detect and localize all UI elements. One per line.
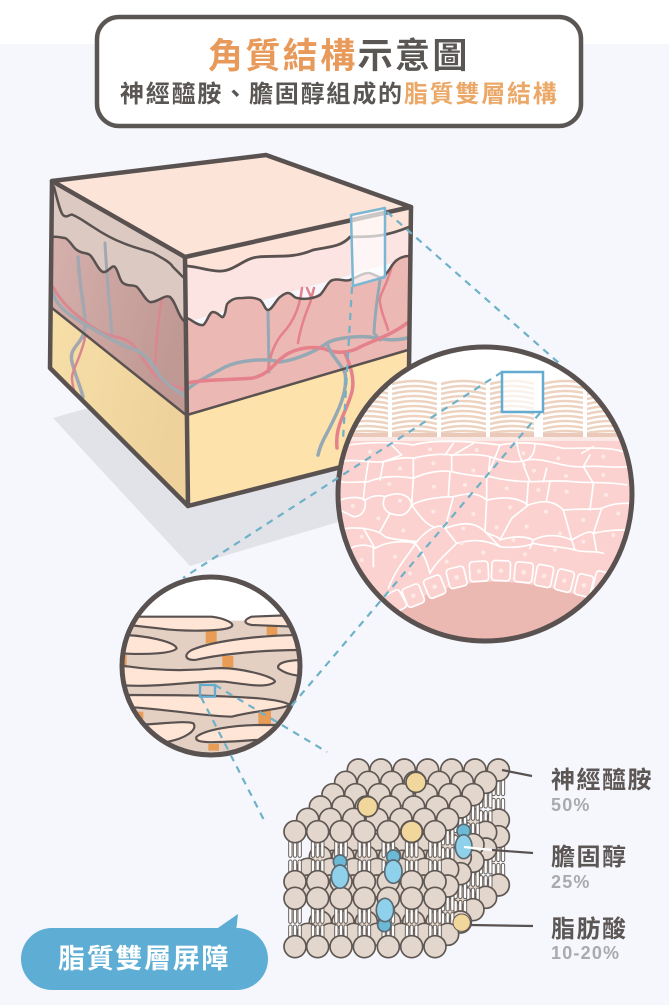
callout: lipid bilayer barrier: 脂質雙層屏障 [58,944,230,974]
cube right face: epidermis [185,207,411,322]
intercellular lipid matrix [125,620,298,752]
label: fatty acid: 脂肪酸 [551,916,628,943]
stratum corneum stacks [350,380,620,441]
highlight box in big circle [502,372,543,412]
orange lipid bridges [122,626,277,751]
label: fatty acid [551,916,628,963]
label: cholesterol: 膽固醇 [551,844,628,871]
label: cholesterol [551,844,628,892]
subtitle: 神經醯胺、膽固醇組成的脂質雙層結構 [120,81,559,108]
dashed connectors between magnifications [183,372,540,822]
cube right face: surface band [185,207,411,271]
cholesterol molecules [331,824,472,932]
dashed connector: cube to big circle [343,212,560,440]
highlight box in small circle [200,685,215,697]
cube right face: dermis [187,256,409,415]
cube left face: fat [50,308,188,506]
cube shadow [53,408,345,566]
title box [97,17,581,126]
highlight box on cube [351,208,385,286]
cube left face: dermis [52,237,186,415]
main title: 角質結構示意圖 [208,37,470,76]
fatty acid heads [358,772,470,931]
callout: lipid bilayer barrier [21,914,268,990]
dermis arc [400,582,586,638]
small circle: corneocyte magnification [115,577,305,761]
label: sphingolipid [551,767,653,815]
cube top face [52,155,411,257]
keratinocyte cells [340,440,630,638]
label: sphingolipid: 神經醯胺 [551,767,653,794]
big circle: skin layer magnification [330,347,640,647]
blood vessels [53,243,407,455]
label: fatty acid: 10-20% [551,943,620,963]
lipid bilayer block [284,759,509,958]
label: sphingolipid: 50% [551,795,591,815]
cube left face: epidermis [52,181,186,322]
label: cholesterol: 25% [551,872,591,892]
corneocyte lenses [118,615,305,743]
cube wave lines and edges [50,155,411,506]
basal cell row [382,560,611,615]
leader lines [464,770,533,926]
skin cube [50,155,411,506]
cube right face: fat [187,350,408,506]
